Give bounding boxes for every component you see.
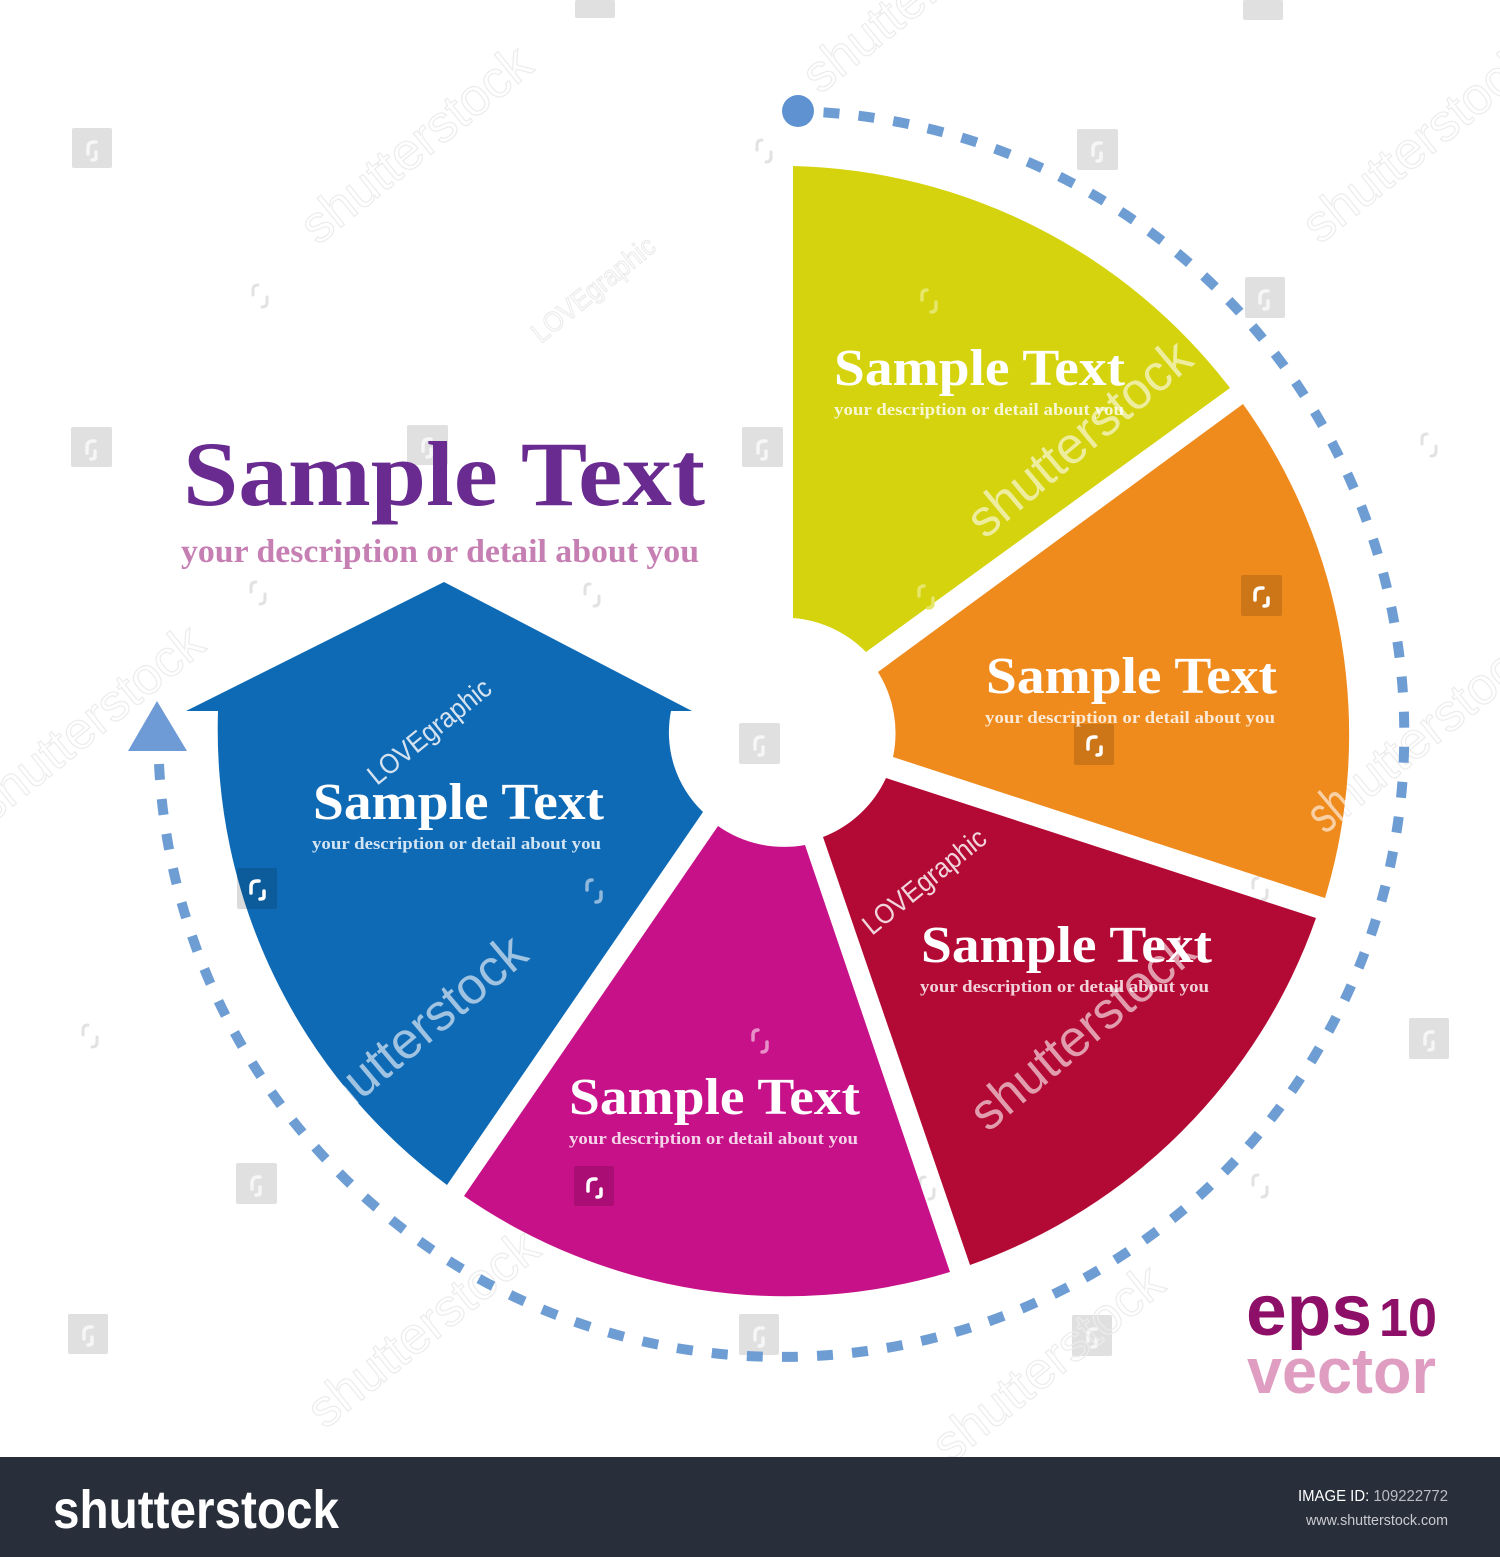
heading description: your description or detail about you bbox=[181, 534, 699, 570]
segment: orange bbox=[878, 404, 1363, 898]
eps10 vector badge: 10 bbox=[1379, 1288, 1437, 1348]
segment: blue arrow: LOVEgraphic bbox=[361, 672, 497, 791]
segment: yellow: your description or detail about you bbox=[834, 400, 1124, 419]
segment: yellow: shutterstock bbox=[955, 327, 1204, 549]
shutterstock logo: shutterstock bbox=[53, 1480, 340, 1540]
watermark text on background: shutterstock bbox=[289, 33, 544, 255]
segment: orange: sh bbox=[1295, 774, 1363, 844]
eps10 vector badge bbox=[1246, 1271, 1437, 1407]
footer bar bbox=[0, 1457, 1500, 1557]
heading bbox=[181, 423, 705, 570]
heading: Sample Text bbox=[183, 423, 705, 525]
eps10 vector badge: vector bbox=[1247, 1335, 1436, 1407]
watermark text on background: LOVEgraphic bbox=[525, 230, 661, 349]
arrow head bbox=[128, 701, 187, 751]
segment: yellow: Sample Text bbox=[834, 340, 1126, 397]
segment: red: your description or detail about you bbox=[920, 977, 1209, 996]
website: www.shutterstock.com bbox=[1305, 1512, 1448, 1529]
image id: IMAGE ID: 109222772 bbox=[1298, 1488, 1448, 1505]
segment: red bbox=[823, 778, 1316, 1265]
small watermark marks on background bbox=[83, 140, 1436, 1199]
segment: magenta: your description or detail about you bbox=[569, 1129, 858, 1148]
segment: orange: Sample Text bbox=[986, 648, 1278, 705]
segment: blue arrow: your description or detail about you bbox=[312, 834, 601, 853]
segment: red: Sample Text bbox=[921, 917, 1213, 974]
segment: magenta bbox=[464, 826, 950, 1296]
segment: blue arrow: shutterstock bbox=[290, 922, 539, 1144]
segment: blue arrow bbox=[186, 582, 703, 1185]
watermark text on background: shutterstock bbox=[296, 1217, 551, 1439]
segment: orange: your description or detail about you bbox=[985, 708, 1275, 727]
start dot bbox=[782, 95, 814, 127]
eps10 vector badge: eps bbox=[1246, 1271, 1372, 1351]
segment: blue arrow: Sample Text bbox=[313, 774, 605, 831]
dashed circular arrow path bbox=[128, 95, 1404, 1357]
segment: yellow bbox=[793, 166, 1230, 652]
segment: red: shutterstock bbox=[958, 920, 1207, 1142]
segment: magenta: Sample Text bbox=[569, 1069, 861, 1126]
watermark text on background: shutterstock bbox=[921, 1252, 1176, 1474]
watermark stamp glyphs in squares bbox=[84, 142, 1433, 1347]
segment: red: LOVEgraphic bbox=[856, 822, 992, 941]
